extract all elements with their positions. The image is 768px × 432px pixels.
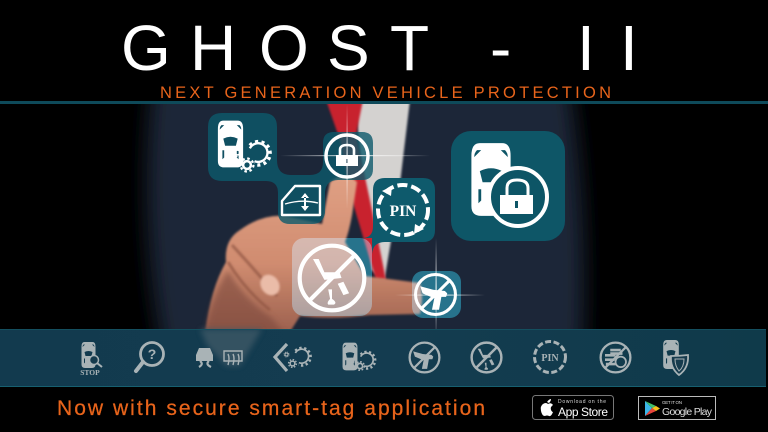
tie (326, 100, 386, 280)
icon: no seat (472, 343, 501, 372)
title: O (259, 12, 309, 84)
icon: car search stop (80, 342, 102, 377)
hand (205, 176, 422, 335)
icon: PIN ring (378, 185, 428, 235)
bottom icon band (0, 329, 766, 387)
photo: businessman pressing virtual icons (137, 104, 594, 329)
shaded palm (204, 270, 281, 329)
subtitle: NEXT GENERATION VEHICLE PROTECTION (160, 84, 611, 102)
badge: App Store: Download on the (558, 399, 606, 405)
icon: PIN ring (534, 342, 566, 372)
icon: large car with lock (471, 143, 547, 226)
icon: PIN ring: PIN (390, 203, 416, 220)
badge: Google Play (638, 396, 716, 420)
translucent icon panels (208, 113, 565, 318)
title: I (577, 12, 595, 84)
curled finger shadow (228, 245, 277, 310)
title (121, 12, 638, 84)
title: - (490, 12, 511, 84)
icon: power window (282, 186, 320, 215)
suit (137, 104, 594, 329)
icon: car shield (663, 340, 688, 375)
panel: PIN (362, 178, 435, 254)
tagline: Now with secure smart-tag application (57, 397, 485, 420)
title: G (121, 12, 171, 84)
icon: skid and defrost (196, 348, 242, 367)
title: S (327, 12, 370, 84)
icon: lock in circle (326, 135, 368, 177)
panel: large car lock (451, 131, 565, 241)
title: T (390, 12, 429, 84)
icon: no money (601, 343, 630, 372)
divider line (0, 101, 768, 104)
icon: car search stop: STOP (80, 368, 100, 377)
fingernail (259, 274, 281, 296)
icon: car with gears (218, 121, 270, 171)
badge: App Store (532, 396, 614, 420)
panel cluster: car gears, window, lock (208, 113, 373, 224)
icon: question magnifier (136, 342, 164, 371)
icon: no gun (416, 275, 455, 314)
icon: no seat (300, 246, 364, 310)
badge: App Store: App Store (558, 405, 608, 419)
shirt cuff showing through (200, 329, 262, 366)
icon: play triangle (645, 401, 660, 416)
panel: seat (292, 238, 372, 316)
badge: Google Play: Google Play (662, 406, 713, 418)
icon: question magnifier: ? (148, 346, 156, 362)
title: I (620, 12, 638, 84)
icon: PIN ring: PIN (541, 353, 559, 364)
icon: apple (541, 399, 553, 416)
flare lines (280, 104, 485, 338)
shirt (355, 100, 410, 282)
icon: no gun (410, 343, 439, 372)
icon: chevron and gears (275, 344, 311, 371)
band icons (80, 340, 688, 377)
panel: gun (412, 271, 461, 318)
title: H (190, 12, 236, 84)
badge: Google Play: GET IT ON (662, 400, 682, 405)
icon: car gears (343, 343, 375, 370)
